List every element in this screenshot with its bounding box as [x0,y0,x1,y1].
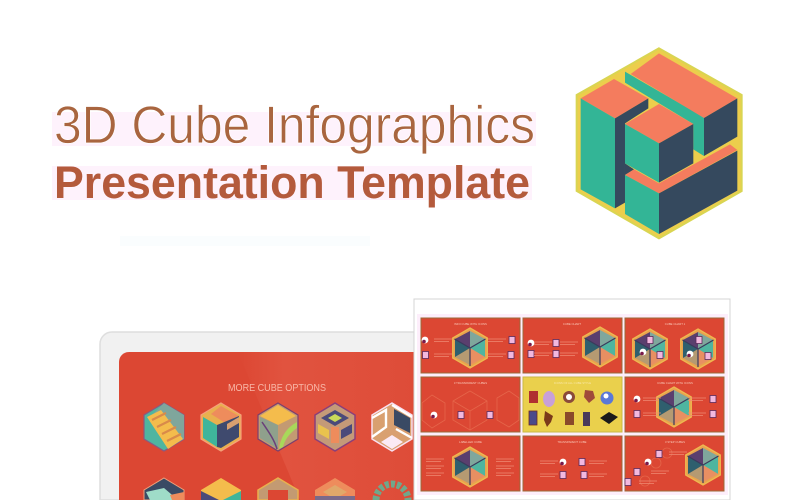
panel: yellow icons [523,377,622,432]
icon: row 2 cubes [144,478,408,500]
panel: transparent cube [523,436,622,491]
panel: cube chart [523,318,622,373]
title: Presentation Template [54,157,530,208]
panel: cube chart with icons: CUBE CHART WITH ICONS [657,381,693,385]
icon: hexagonal cube logo [577,48,742,238]
panel: labelled cube [421,436,520,491]
screen heading: MORE CUBE OPTIONS [228,383,326,394]
panel: cube chart: CUBE CHART [563,322,581,326]
panel: yellow icons: ICONS OF ALL CUBE STYLE [554,381,591,385]
panel: cube chart 1 [625,318,724,373]
screen glare [238,352,420,500]
panel: step cubes [625,436,724,491]
icon: stairs cube [144,403,184,451]
panel: info cube with icons: INFO CUBE WITH ICONS [454,322,487,326]
title: 3D Cube Infographics [54,96,535,155]
panel: transparent cube: TRANSPARENT CUBE [557,440,587,444]
panel: labelled cube: LABELLED CUBE [459,440,482,444]
icon: blocks cube [201,403,241,451]
tablet frame [100,332,420,500]
panel: transparent cubes: 3 TRANSPARENT CUBES [454,381,487,385]
tablet screen [119,352,420,500]
tablet mockup [100,332,420,500]
panel: info cube with icons [421,318,520,373]
panel: transparent cubes [421,377,520,432]
icon: T-shape cube [315,403,355,451]
slide overview sheet [414,299,730,500]
icon: curved cube [258,403,298,451]
title background tint [52,112,536,146]
icon: white frame cube [372,403,412,451]
title [54,96,535,208]
panel: cube chart with icons [625,377,724,432]
panel: cube chart 1: CUBE CHART 1 [665,322,686,326]
panel: step cubes: 3 STEP CUBES [665,440,685,444]
